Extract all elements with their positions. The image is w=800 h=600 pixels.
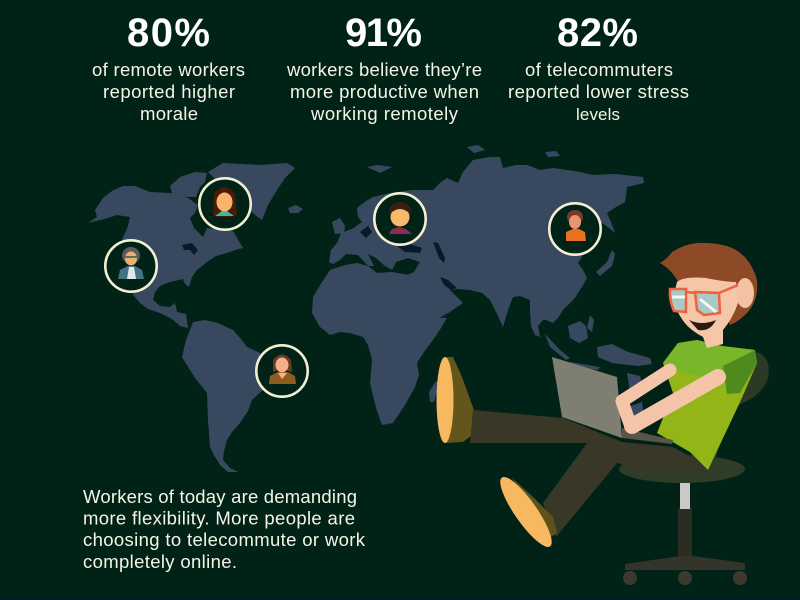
inland seas [182,226,457,290]
stat: 82% [508,11,689,124]
caption: stress levels: reported lower stress [508,81,689,102]
caption: productivity: workers believe they’re [286,59,482,80]
South America [182,320,272,472]
laptop [552,357,673,444]
mouth [689,320,716,330]
pin: South America woman [256,345,308,397]
caption: stress levels: of telecommuters [525,59,673,80]
text block: flexibility statement: completely online. [83,551,237,572]
caption: productivity: working remotely [310,103,459,124]
pin: North America woman [199,178,251,230]
Madagascar [429,381,439,402]
icon: avatar with brown top [269,354,296,384]
office chair [619,352,769,585]
Southeast Asia islands [568,321,588,343]
shoe: raised foot [436,357,475,443]
stat: 82%: 82% [557,11,638,55]
UK and Ireland [332,218,345,234]
stat: 91%: 91% [345,11,422,55]
icon: avatar woman with orange top [566,210,586,241]
Eurasia [329,157,644,337]
Greenland [208,163,295,220]
icon: avatar woman with teal top [213,187,237,217]
Arctic islands [170,172,207,197]
caption: remote workers morale: morale [140,103,198,124]
text block: flexibility statement: more flexibility. More people are [83,508,355,528]
stat: 80% [92,11,245,124]
caption: productivity: more productive when [290,81,479,102]
pin: Europe man [374,193,426,245]
Arctic Russia islands [467,145,485,153]
icon: avatar man with magenta top [389,202,412,234]
Africa [312,263,447,425]
North America [88,186,243,328]
legs [470,410,707,537]
Japan [596,250,615,276]
text block: flexibility statement: Workers of today are demanding [83,486,357,507]
arms [622,370,718,426]
shoe: lower foot [493,471,559,553]
caption: stress levels [508,59,689,124]
glasses [670,285,738,315]
Iceland [288,205,303,213]
caption: productivity [286,59,482,124]
illustration: man with laptop [436,243,769,585]
head [660,243,757,348]
pin: West coast person [105,240,157,292]
text block: flexibility statement: choosing to telecommute or work [83,529,366,550]
pin: Asia woman [549,203,601,255]
text block: flexibility statement [83,486,366,572]
icon: avatar with glasses and blue jacket [118,247,144,279]
stat: 80%: 80% [127,11,210,55]
world map [88,145,652,472]
caption: remote workers morale [92,59,245,124]
torso: green shirt [657,340,757,470]
Australia fragment [627,373,644,392]
caption: stress levels: levels [576,105,620,124]
caption: remote workers morale: reported higher [103,81,235,102]
caption: remote workers morale: of remote workers [92,59,245,80]
stat: 91% [286,11,482,124]
